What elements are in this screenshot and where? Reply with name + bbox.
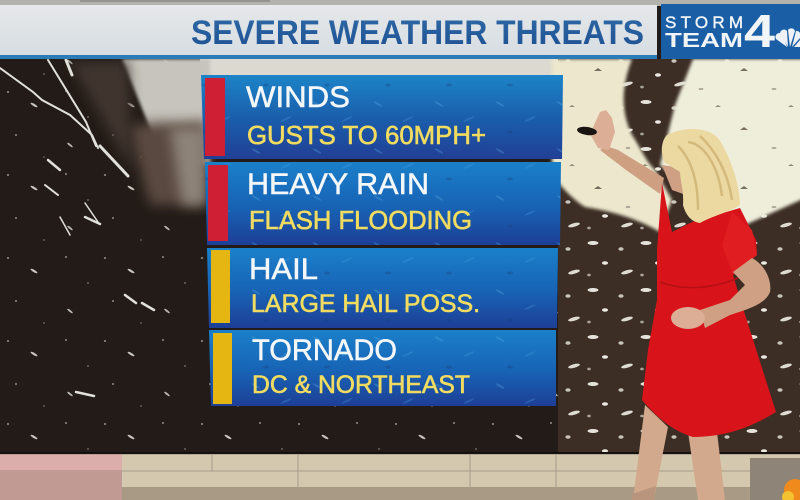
logo: Storm Team 4: STORM — [665, 13, 743, 32]
severity bar: yellow — [211, 250, 230, 323]
dress — [642, 183, 776, 437]
title: SEVERE WEATHER THREATS — [191, 14, 644, 52]
arm raised — [600, 146, 664, 194]
legs — [633, 405, 668, 500]
panel: winds — [201, 75, 563, 159]
white streaks on dark wall — [0, 60, 154, 396]
top strip — [0, 0, 800, 6]
icon: peacock — [775, 28, 800, 47]
severity bar: red — [205, 78, 225, 156]
face — [662, 165, 686, 195]
clicker — [577, 126, 597, 136]
heading: heavy rain: HEAVY RAIN — [247, 168, 429, 201]
logo: Storm Team 4 — [661, 4, 800, 59]
header bar — [0, 5, 657, 59]
heading: hail: HAIL — [249, 253, 318, 286]
presenter — [577, 110, 776, 500]
detail: dc and northeast: DC & NORTHEAST — [252, 371, 470, 399]
detail: flash flooding: FLASH FLOODING — [249, 205, 472, 235]
detail: large hail: LARGE HAIL POSS. — [251, 290, 480, 318]
panel: heavy rain — [205, 162, 561, 245]
hair — [662, 129, 740, 223]
heading: tornado: TORNADO — [252, 334, 397, 367]
bright cream window patches — [552, 59, 672, 232]
brown textured right wall — [558, 59, 800, 453]
logo: Storm Team 4: 4 — [744, 5, 775, 57]
panel: tornado — [209, 330, 556, 406]
detail: gusts: GUSTS TO 60MPH+ — [247, 120, 486, 150]
severity bar: red — [208, 165, 228, 241]
severity bar: yellow — [213, 333, 232, 404]
icon: NBC peacock bug — [750, 458, 800, 500]
lower arm — [700, 258, 770, 328]
logo: Storm Team 4: TEAM — [665, 30, 743, 52]
panel: hail — [207, 248, 558, 328]
marble floor — [0, 452, 800, 500]
heading: winds: WINDS — [246, 81, 350, 114]
light patch upper centre — [200, 59, 565, 79]
